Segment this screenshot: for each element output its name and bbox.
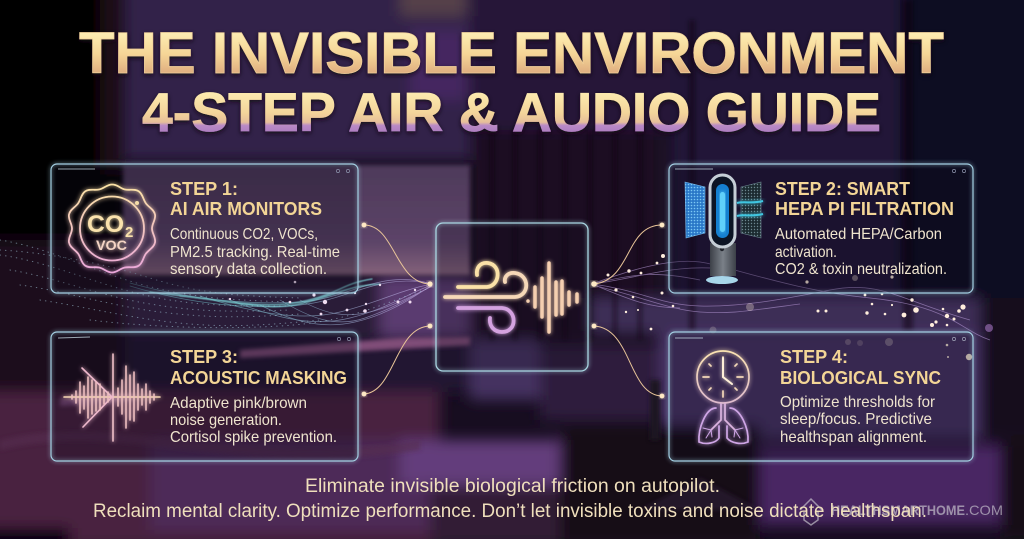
panel 3 window bar [58,337,351,341]
text: step 4 description [780,394,935,446]
connector: step 3 to hub [362,324,432,396]
text: step 3 description: Cortisol spike prevention. [170,429,337,446]
footer text: Eliminate invisible biological friction on autopilot. [305,476,720,497]
text: step 2 description [775,226,947,278]
heading: step 3: ACOUSTIC MASKING [170,367,347,388]
title [79,21,944,143]
heading: step 3: STEP 3: [170,346,238,367]
text: step 4 description: sleep/focus. Predictive [780,411,932,428]
panel: step 2 HEPA filtration [669,164,973,293]
heading: step 1 [170,178,322,219]
flowing particle wave, left [0,240,432,328]
text: step 2 description: activation. [775,244,837,261]
text: step 3 description: Adaptive pink/brown [170,395,307,412]
panel 1 window bar [58,169,350,173]
connector: hub to step 2 [591,223,664,287]
icon: masked sound wave [64,354,160,441]
watermark [800,499,1003,525]
text: step 3 description [170,395,337,446]
panel 2 window bar [675,169,966,173]
heading: step 4: STEP 4: [780,346,848,367]
text: step 2 description: Automated HEPA/Carbon [775,226,942,243]
heading: step 4 [780,346,941,388]
panel: step 4 biological sync [669,332,973,461]
icon: wind and sound wave [445,263,577,332]
heading: step 2 [775,178,954,219]
icon: clock and lungs [697,351,749,443]
heading: step 1: AI AIR MONITORS [170,198,322,219]
title: 4-STEP AIR & AUDIO GUIDE [142,81,881,143]
footer text [93,476,927,522]
text: step 4 description: Optimize thresholds for [780,394,935,411]
text: step 1 description: PM2.5 tracking. Real-time [170,244,340,261]
heading: step 2: HEPA PI FILTRATION [775,198,954,219]
flowing particle streams, right [592,254,993,360]
text: step 4 description: healthspan alignment. [780,429,927,446]
title: THE INVISIBLE ENVIRONMENT [79,21,944,86]
text: step 1 description: Continuous CO2, VOCs, [170,226,318,243]
icon: CO2 VOC badge: VOC [96,237,127,253]
text: step 1 description: sensory data collection. [170,261,327,278]
footer text: Reclaim mental clarity. Optimize performance. Don’t let invisible toxins and noise dictate healthspan. [93,501,927,522]
icon: air purifier with filters [685,175,763,284]
panel: central hub [436,223,588,371]
icon: CO2 VOC badge: 2 [125,224,133,241]
heading: step 4: BIOLOGICAL SYNC [780,367,941,388]
text: step 3 description: noise generation. [170,412,282,429]
heading: step 1: STEP 1: [170,178,238,199]
heading: step 3 [170,346,347,388]
text: step 1 description [170,226,340,278]
panel: step 3 acoustic masking [51,332,358,461]
text: step 2 description: CO2 & toxin neutralization. [775,261,947,278]
icon: CO2 VOC badge [69,184,155,272]
connector: step 1 to hub [362,223,433,287]
heading: step 2: STEP 2: SMART [775,178,911,199]
icon: CO2 VOC badge: CO [87,211,124,238]
watermark: .COM [965,502,1003,518]
panel 4 window bar [675,337,966,341]
connector: hub to step 4 [592,324,664,398]
panel: step 1 air monitors [51,164,358,293]
watermark: HEALTHSMARTHOME [831,502,965,518]
